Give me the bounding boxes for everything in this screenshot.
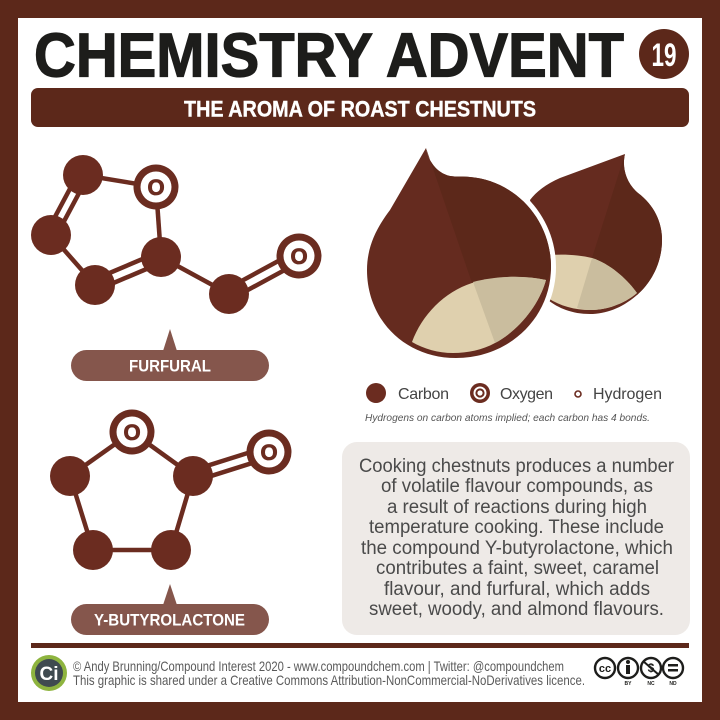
molecule: y-butyrolactone: O <box>260 440 278 465</box>
label: furfural <box>71 329 269 381</box>
footer credits: This graphic is shared under a Creative Commons Attribution-NonCommercial-NoDerivatives licence. <box>73 672 585 688</box>
legend <box>366 383 662 403</box>
subtitle banner <box>31 88 689 127</box>
day number badge: 19 <box>652 37 676 73</box>
legend note: Hydrogens on carbon atoms implied; each carbon has 4 bonds. <box>365 412 650 424</box>
text panel: contributes a faint, sweet, caramel <box>376 558 659 579</box>
label: y-butyrolactone <box>71 584 269 635</box>
small chestnut <box>530 154 662 314</box>
molecule: furfural: O <box>147 175 165 200</box>
text panel: sweet, woody, and almond flavours. <box>369 599 664 620</box>
legend: carbon <box>366 383 449 403</box>
licence icons: NC <box>647 681 655 687</box>
licence icons <box>595 658 683 687</box>
text panel: of volatile flavour compounds, as <box>381 476 653 497</box>
text panel: a result of reactions during high <box>387 497 647 518</box>
label: y-butyrolactone: Y-BUTYROLACTONE <box>94 610 245 630</box>
logo: compound interest <box>31 655 67 691</box>
day number badge <box>639 29 689 79</box>
footer credits <box>73 658 585 688</box>
white gap ring <box>362 170 556 364</box>
legend: hydrogen: Hydrogen <box>593 386 662 403</box>
subtitle banner: THE AROMA OF ROAST CHESTNUTS <box>184 96 536 122</box>
label: furfural: FURFURAL <box>129 356 211 376</box>
licence icons: cc <box>599 663 611 675</box>
legend: carbon: Carbon <box>398 386 449 403</box>
text panel: the compound Y-butyrolactone, which <box>361 538 673 559</box>
footer credits: © Andy Brunning/Compound Interest 2020 - www.compoundchem.com | Twitter: @compoundchem <box>73 658 564 674</box>
legend: oxygen <box>470 383 553 403</box>
text panel: Cooking chestnuts produces a number <box>359 456 675 477</box>
molecule: furfural: O <box>290 244 308 269</box>
text panel <box>342 442 690 635</box>
molecule: y-butyrolactone <box>50 410 292 570</box>
logo: compound interest: Ci <box>40 664 58 685</box>
large chestnut <box>367 148 551 358</box>
molecule: furfural <box>31 155 322 314</box>
molecule: y-butyrolactone: O <box>123 420 141 445</box>
licence icons: ND <box>669 681 677 687</box>
title: CHEMISTRY ADVENT <box>34 22 624 90</box>
illustration: roast chestnuts <box>362 148 662 364</box>
footer divider <box>31 643 689 648</box>
text panel: flavour, and furfural, which adds <box>384 579 650 600</box>
licence icons: $ <box>648 661 655 675</box>
legend: oxygen: Oxygen <box>500 386 553 403</box>
text panel: temperature cooking. These include <box>369 517 664 538</box>
licence icons: BY <box>625 681 632 687</box>
